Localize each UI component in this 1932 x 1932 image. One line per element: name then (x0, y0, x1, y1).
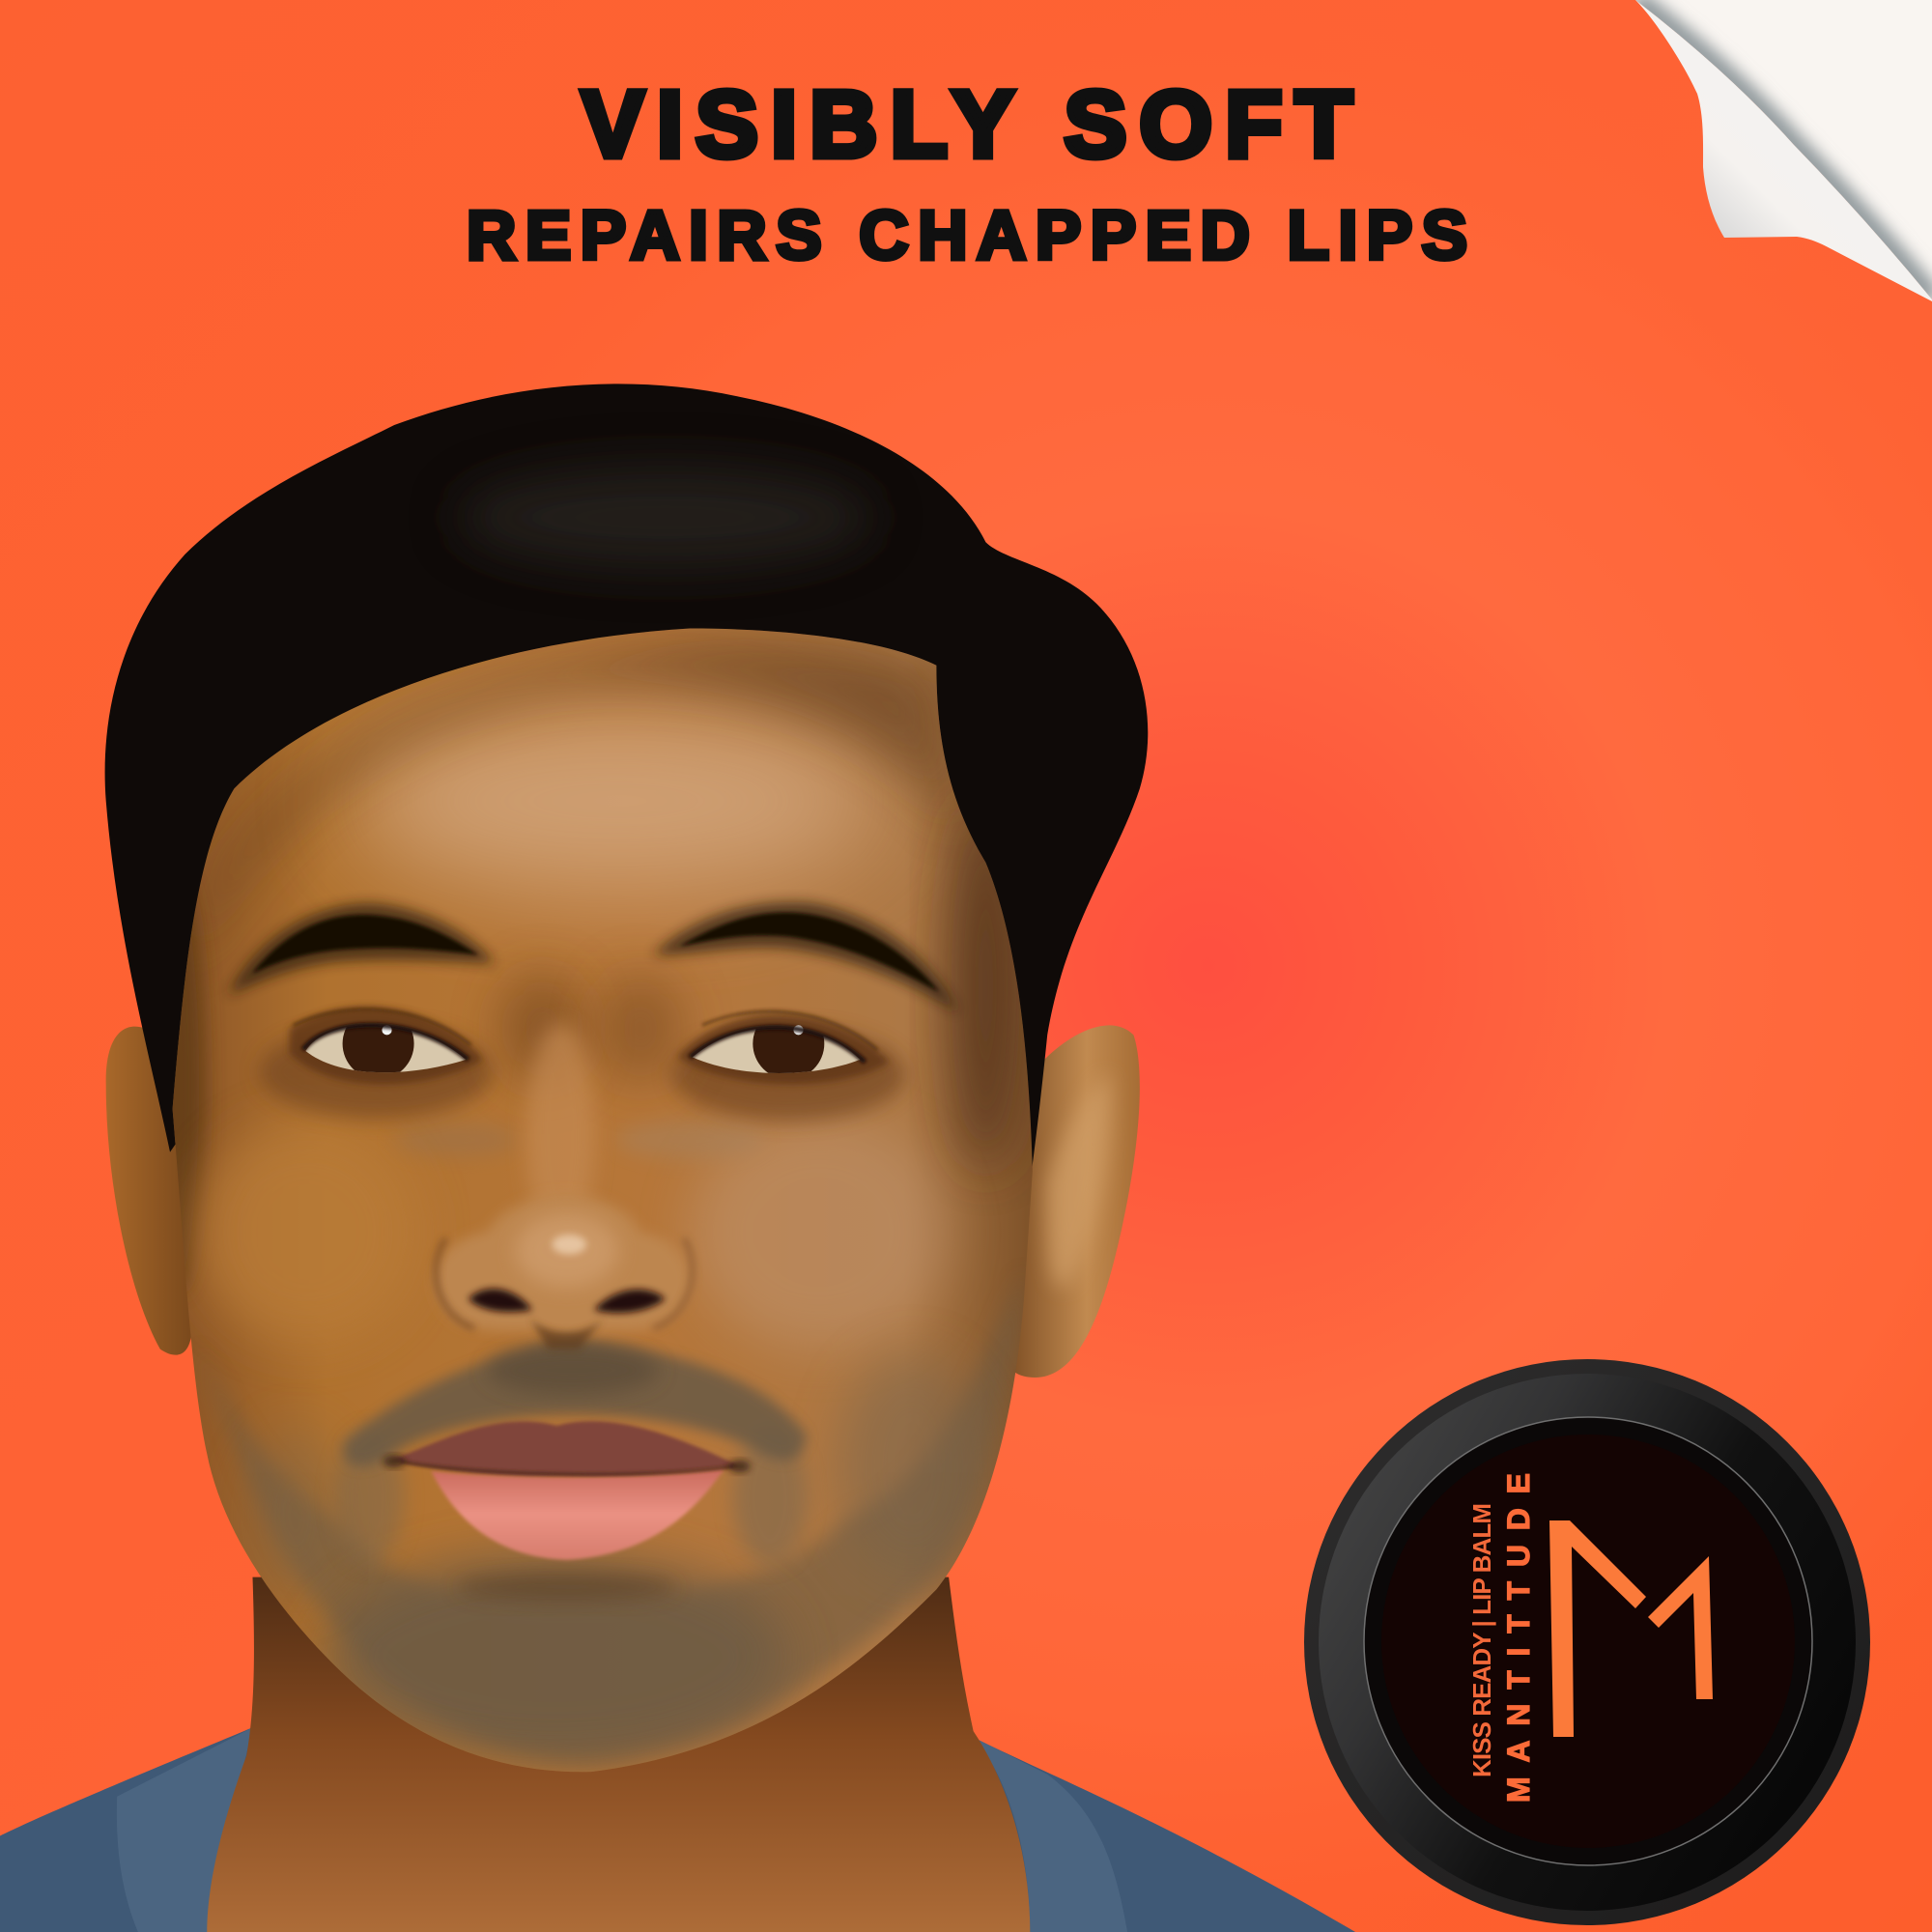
jar outer rim (1304, 1359, 1870, 1925)
right temple shadow (952, 801, 1020, 1171)
beard tone on chin (321, 1552, 788, 1762)
sweater (0, 1727, 1355, 1932)
subtitle: REPAIRS CHAPPED LIPS: REPAIRS CHAPPED LIPS (467, 198, 1467, 274)
lips (384, 1421, 751, 1560)
brand name: MANTITTUDE (1501, 1473, 1536, 1803)
product name: KISS READY | LIP BALM (1467, 1503, 1496, 1777)
left cheek (180, 1126, 327, 1339)
logo M (1549, 1520, 1713, 1737)
jaw stubble shadow (218, 1313, 1015, 1768)
right ear (1008, 1025, 1140, 1378)
left eye (290, 1007, 483, 1084)
title: VISIBLY SOFT: VISIBLY SOFT (582, 71, 1352, 177)
forehead highlight (352, 708, 881, 894)
face (152, 629, 1033, 1772)
product: Mantittude lip balm jar (1304, 1359, 1870, 1925)
jar label disc (1381, 1435, 1795, 1848)
chin crease shadow (456, 1573, 678, 1602)
left ear (106, 1027, 192, 1355)
right eyebrow (653, 902, 958, 1012)
jar bezel (1319, 1374, 1856, 1911)
hairline shadow (206, 628, 957, 914)
portrait of man (0, 384, 1355, 1932)
eye socket shading (259, 1025, 493, 1119)
left face edge shadow (172, 897, 214, 1293)
mustache (344, 1337, 807, 1466)
page curl in top right corner (1635, 0, 1932, 301)
hair sheen (456, 466, 875, 569)
neck (207, 1577, 1030, 1932)
hair (105, 384, 1148, 1182)
right eye (678, 1008, 890, 1084)
nose (435, 1023, 693, 1350)
under eye tone (406, 1125, 507, 1153)
jar inner black ring (1364, 1417, 1812, 1865)
left eyebrow (228, 903, 496, 996)
right cheek highlight (690, 1115, 949, 1350)
